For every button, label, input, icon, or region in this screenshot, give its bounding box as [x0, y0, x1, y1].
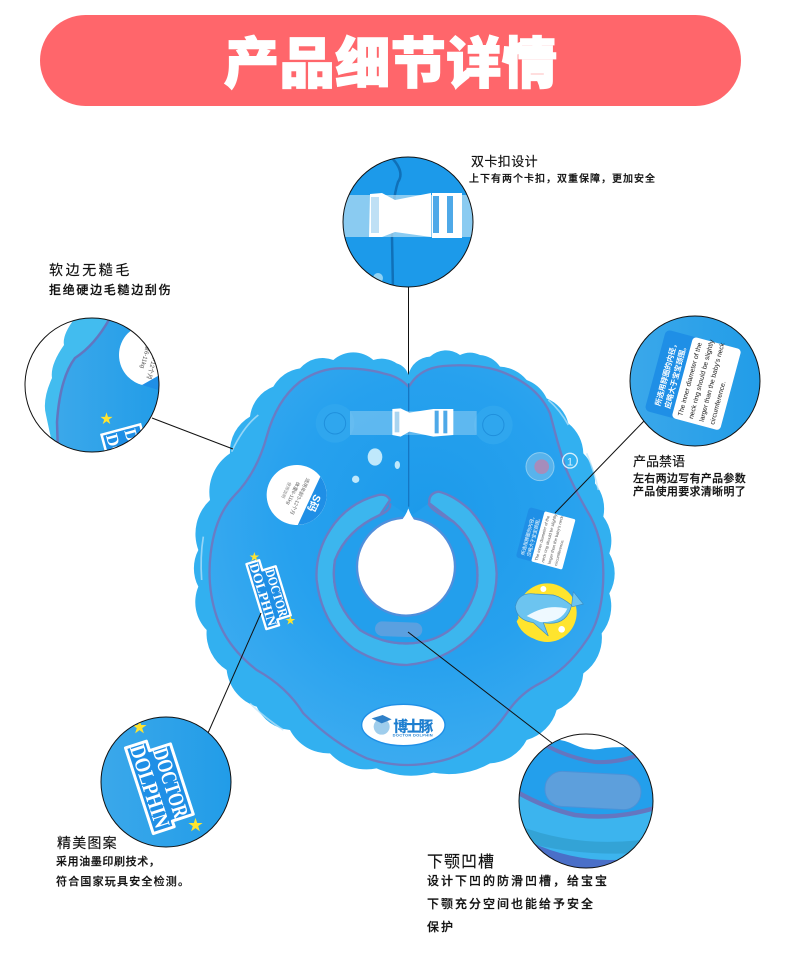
- brand logo: [362, 704, 445, 746]
- stars: ★: [285, 616, 295, 627]
- detail circle: printed pattern: ★: [132, 719, 147, 736]
- label: double buckle: 双卡扣设计: [471, 154, 538, 169]
- detail circle: soft edge: 适用年龄3-12个月: [145, 332, 165, 381]
- bubbles: [352, 448, 400, 483]
- product: inflatable neck ring: [194, 350, 615, 776]
- label: chin groove: 设计下凹的防滑凹槽，给宝宝: [427, 873, 609, 888]
- connector: double buckle: [408, 286, 410, 418]
- detail circle: warning label: [628, 314, 763, 449]
- label: soft edge: [49, 262, 172, 297]
- ring silhouette: [194, 350, 615, 776]
- stars: [249, 553, 295, 627]
- connector: chin groove: [408, 632, 552, 743]
- inner collar band: [316, 492, 497, 665]
- warning label: 应略大于宝宝颈围。: [525, 515, 543, 557]
- label: warning: [633, 454, 746, 498]
- center seam: [407, 383, 411, 507]
- warning label: neck ring should be slightly: [540, 513, 558, 563]
- warning label: larger than the baby's neck: [547, 514, 564, 565]
- collar inner: [334, 503, 477, 643]
- label: double buckle: 上下有两个卡扣，双重保障，更加安全: [469, 172, 656, 185]
- warning label: [516, 506, 576, 570]
- detail circle: soft edge: DOL: [102, 432, 130, 472]
- label: warning: 产品使用要求清晰明了: [633, 484, 746, 498]
- rim highlights: [201, 400, 598, 730]
- connector: warning label: [555, 421, 644, 513]
- detail circle: printed pattern: ★: [188, 817, 203, 834]
- label: warning: 左右两边写有产品参数: [633, 471, 746, 485]
- title: 产品细节详情: [224, 33, 557, 95]
- detail circle: warning label: The inner diameter of the: [677, 342, 704, 417]
- round size label: 使用说明: [279, 481, 293, 500]
- label: printed pattern: 采用油墨印刷技术，: [56, 854, 160, 868]
- label: soft edge: 拒绝硬边毛糙边刮伤: [49, 282, 172, 297]
- label: double buckle: [469, 154, 656, 185]
- stars: ★: [249, 553, 259, 564]
- detail circle: printed pattern: [100, 715, 234, 849]
- detail circle: warning label: 所选用脖圈的内径，: [652, 339, 679, 407]
- dolphin sticker: [515, 583, 583, 642]
- warning label: circumference.: [553, 539, 565, 566]
- detail circle: soft edge: 体重6-11kg: [138, 338, 154, 369]
- number mark: [563, 453, 577, 468]
- detail circle: warning label: larger than the baby's neck: [699, 342, 727, 423]
- neck hole: [357, 508, 455, 616]
- label: chin groove: 下颚充分空间也能给予安全: [427, 896, 595, 911]
- detail circle: printed pattern: DOLPHIN: [125, 741, 175, 831]
- label: chin groove: 下颚凹槽: [427, 853, 495, 871]
- detail circle: warning label: neck ring should be slightly: [688, 339, 716, 420]
- ring body and seam: [210, 365, 603, 765]
- detail circle: double buckle: [340, 155, 476, 290]
- warning label: The inner diameter of the: [534, 514, 551, 561]
- connector: printed pattern: [208, 613, 261, 733]
- printed brand text: [246, 556, 293, 629]
- title banner: [40, 15, 741, 106]
- warning label: 所选用脖圈的内径，: [519, 514, 537, 556]
- round size label: 体重6-11kg: [284, 481, 301, 506]
- valve: [526, 453, 554, 481]
- label: printed pattern: [56, 835, 190, 888]
- detail circle: warning label: 应略大于宝宝颈围。: [662, 342, 689, 409]
- brand logo: 博士豚: [393, 718, 434, 736]
- round size label: [257, 455, 337, 535]
- round size label: S码: [304, 492, 324, 514]
- connector: soft edge: [152, 418, 233, 449]
- buckle straps: [316, 404, 513, 444]
- chin groove: [375, 621, 423, 637]
- detail circle: soft edge: DOC: [120, 427, 149, 468]
- detail circle: printed pattern: DOCTOR: [148, 745, 194, 821]
- detail circle: soft edge: [24, 318, 160, 452]
- round size label: 适用年龄3-12个月: [288, 477, 311, 516]
- detail circle: chin groove: [517, 732, 655, 870]
- printed brand text: DOLPHIN: [247, 561, 280, 628]
- detail circle: soft edge: ★: [100, 411, 113, 426]
- label: chin groove: 保护: [427, 919, 455, 934]
- number mark: 1: [567, 456, 573, 468]
- printed brand text: DOCTOR: [262, 567, 291, 619]
- label: warning: 产品禁语: [633, 454, 685, 469]
- detail circle: warning label: circumference.: [709, 381, 728, 426]
- label: printed pattern: 符合国家玩具安全检测。: [56, 874, 190, 888]
- label: soft edge: 软边无糙毛: [49, 262, 132, 278]
- brand logo: DOCTOR DOLPHIN: [393, 733, 433, 738]
- label: printed pattern: 精美图案: [57, 835, 118, 851]
- label: chin groove: [427, 853, 609, 934]
